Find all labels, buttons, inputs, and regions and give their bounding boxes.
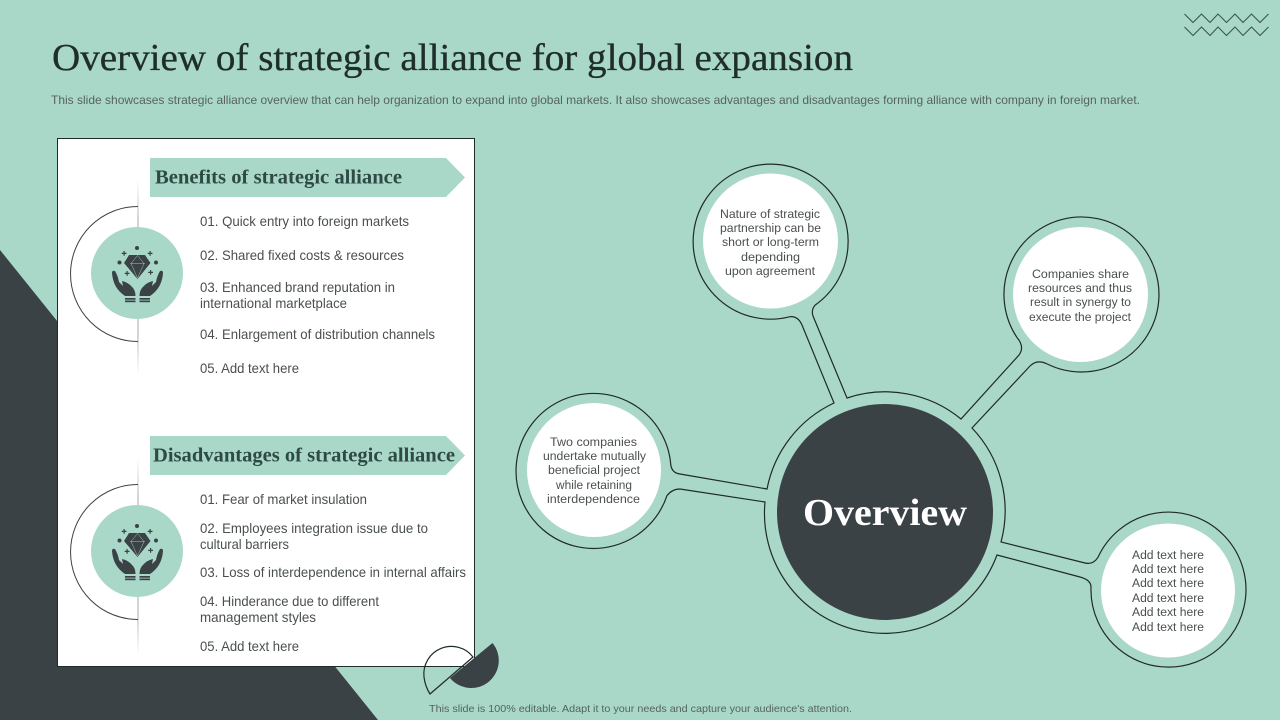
disadvantages list: 02. Employees integration issue due to [200,520,428,536]
bubble: nature of partnership: depending [741,250,800,264]
bubble: nature of partnership: short or long-term [722,235,819,249]
hub circle [777,404,993,620]
benefits heading [150,158,465,197]
icon: hands holding diamond [91,227,183,319]
hub circle: Overview [803,492,968,534]
bubble: shared resources: Companies share [1032,267,1129,281]
bubble: shared resources: resources and thus [1028,281,1132,295]
disadvantages heading: Disadvantages of strategic alliance [153,446,455,466]
benefits list: international marketplace [200,295,347,311]
disadvantages guide lines [71,458,139,655]
bubble: two companies: beneficial project [548,463,641,477]
bubble: add text: Add text here [1132,620,1204,634]
bubble: two companies [527,403,661,537]
disadvantages list: 03. Loss of interdependence in internal affairs [200,564,466,580]
bubble: nature of partnership: upon agreement [725,264,816,278]
bubble: shared resources: execute the project [1029,310,1132,324]
disadvantages list: management styles [200,609,316,625]
diagram: overview hub and spokes [516,164,1246,667]
benefits guide lines [71,180,139,375]
panel background [58,138,474,666]
bubble: shared resources: result in synergy to [1030,295,1131,309]
bubble: add text: Add text here [1132,562,1204,576]
section: benefits [71,158,465,376]
bubble: add text: Add text here [1132,576,1204,590]
decoration: zigzag lines [1184,14,1268,36]
benefits list: 01. Quick entry into foreign markets [200,213,409,229]
disadvantages list: 01. Fear of market insulation [200,491,367,507]
bubble: shared resources [1013,227,1148,362]
bubble: nature of partnership: partnership can be [720,221,821,235]
hub and bubble outline [516,164,1246,667]
subtitle: This slide showcases strategic alliance overview that can help organization to expand into global markets. It also showcases advantages and disadvantages forming alliance with company in foreign market. [51,93,1140,107]
benefits list: 05. Add text here [200,360,299,376]
disadvantages list: 05. Add text here [200,638,299,654]
bubble: two companies: Two companies [550,435,637,449]
dark corner shape [0,250,378,720]
bubble: add text: Add text here [1132,605,1204,619]
panel: benefits and disadvantages [58,138,474,666]
benefits list: 02. Shared fixed costs & resources [200,247,404,263]
benefits heading: Benefits of strategic alliance [155,168,402,188]
bubble: nature of partnership [703,174,838,308]
benefits list [200,213,435,376]
benefits list: 03. Enhanced brand reputation in [200,279,395,295]
bubble: nature of partnership: Nature of strategic [720,207,820,221]
disadvantages list [200,491,466,654]
benefits list: 04. Enlargement of distribution channels [200,326,435,342]
bubble: add text [1101,524,1235,658]
title: Overview of strategic alliance for global expansion [52,37,853,79]
bubble: add text: Add text here [1132,591,1204,605]
bubble: two companies: while retaining [555,478,632,492]
icon: hands holding diamond [91,505,183,597]
bubble: two companies: undertake mutually [543,449,647,463]
disadvantages list: cultural barriers [200,536,289,552]
bubble: two companies: interdependence [547,492,640,506]
disadvantages heading [150,436,465,475]
decoration: semicircle pair [424,643,499,694]
section: disadvantages [71,436,466,655]
bubble: add text: Add text here [1132,548,1204,562]
footer note: This slide is 100% editable. Adapt it to your needs and capture your audience's attention. [429,703,852,715]
disadvantages list: 04. Hinderance due to different [200,593,379,609]
